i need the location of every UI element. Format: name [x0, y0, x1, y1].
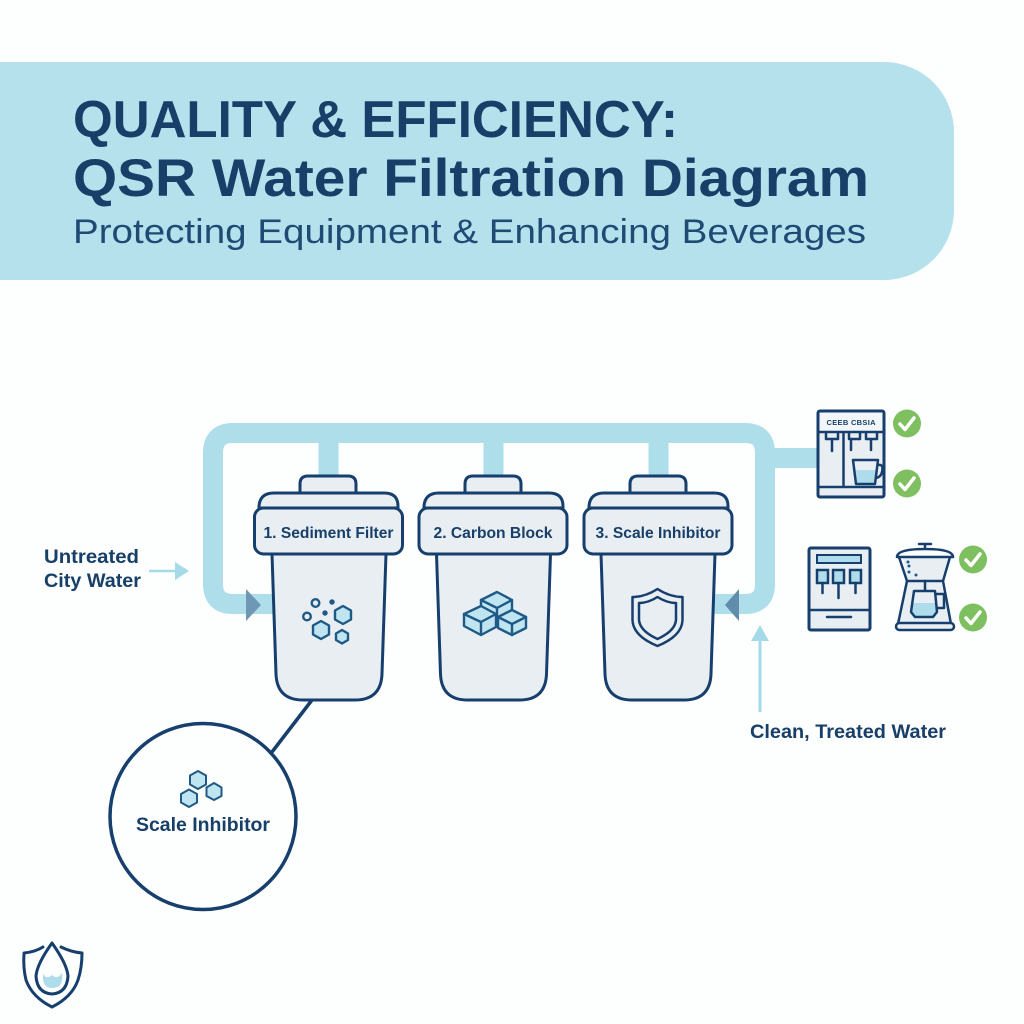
- filter 3: scale inhibitor: [584, 476, 732, 700]
- check mark 4: [959, 604, 987, 632]
- callout connector line: [272, 700, 312, 752]
- label: clean treated water: Clean, Treated Water: [750, 722, 947, 743]
- arrow: untreated water in: [149, 562, 189, 580]
- callout label: Scale Inhibitor: [136, 815, 271, 836]
- label: untreated city water: Untreated: [44, 547, 139, 568]
- callout: scale inhibitor detail: [110, 724, 296, 910]
- check mark 1: [893, 410, 921, 438]
- icon: shield: [632, 589, 682, 646]
- title line 2: QSR Water Filtration Diagram: [73, 149, 869, 208]
- label: untreated city water: City Water: [44, 571, 142, 592]
- arrow: treated water out: [751, 625, 769, 712]
- title line 1: QUALITY & EFFICIENCY:: [73, 91, 678, 149]
- dispenser brand text: CEEB CBSIA: [826, 418, 876, 427]
- header banner: [0, 62, 954, 280]
- check mark 2: [893, 470, 921, 498]
- logo: shield with water drop: [24, 943, 82, 1007]
- outlet flow arrow: [725, 589, 739, 621]
- filter 1: sediment filter: [254, 476, 402, 700]
- icon: beverage dispenser: [818, 411, 884, 497]
- label: sediment filter: 1. Sediment Filter: [264, 525, 394, 542]
- label: carbon block: 2. Carbon Block: [434, 525, 553, 542]
- subtitle: Protecting Equipment & Enhancing Beverages: [73, 213, 866, 251]
- label: untreated city water: [44, 547, 142, 592]
- icon: carbon cubes: [464, 592, 526, 635]
- icon: sediment particles: [303, 599, 351, 644]
- inlet flow arrow: [246, 589, 261, 621]
- check mark 3: [959, 546, 987, 574]
- icon: coffee maker: [896, 544, 954, 630]
- icon: scale crystals: [181, 771, 222, 807]
- filter 2: carbon block: [419, 476, 567, 700]
- water pipes: [213, 433, 820, 604]
- icon: soda fountain: [809, 548, 870, 630]
- label: scale inhibitor: 3. Scale Inhibitor: [596, 525, 720, 542]
